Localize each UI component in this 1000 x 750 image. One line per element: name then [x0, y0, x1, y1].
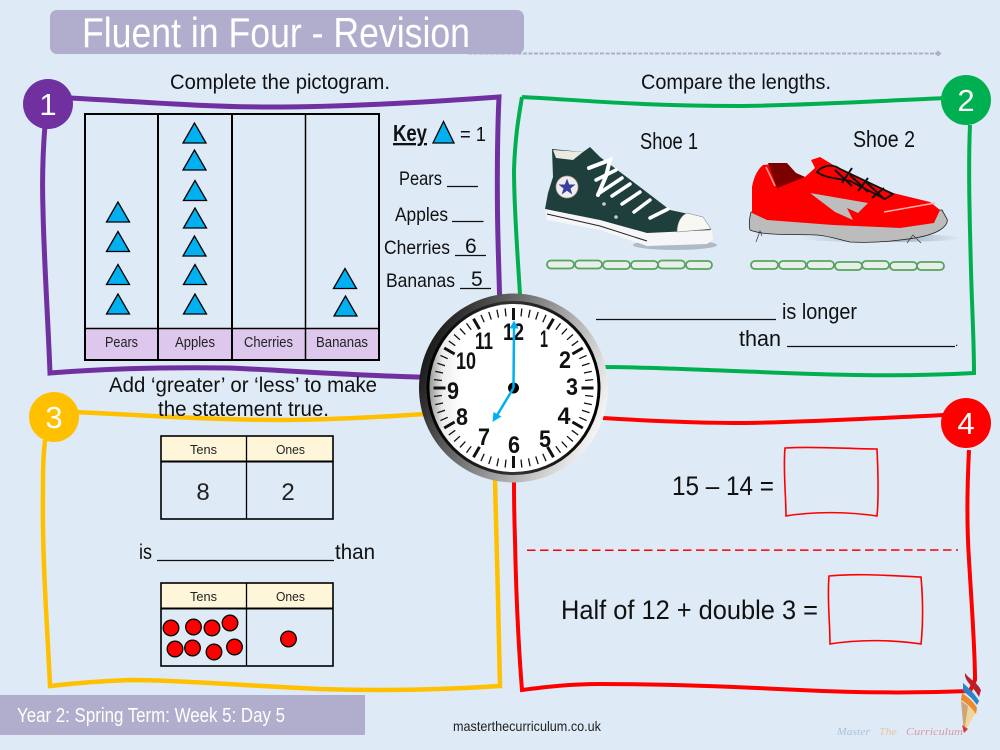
comparison sentence: than	[739, 326, 781, 351]
clock numerals	[447, 319, 578, 459]
website address: masterthecurriculum.co.uk	[453, 718, 602, 734]
divider	[527, 549, 958, 551]
clock numerals: 1	[540, 326, 548, 353]
number badge 1	[23, 79, 73, 129]
clock numerals: 5	[539, 426, 551, 453]
number badge 2: 2	[957, 83, 975, 118]
clock numerals: 6	[508, 432, 520, 459]
footer banner: Year 2: Spring Term: Week 5: Day 5	[17, 705, 285, 727]
panel 3 heading: Add ‘greater’ or ‘less’ to make	[109, 374, 377, 397]
title banner: Fluent in Four - Revision	[82, 9, 470, 56]
number badge 1: 1	[39, 87, 57, 122]
clock numerals: 12	[503, 319, 524, 346]
number badge 3: 3	[45, 400, 63, 435]
logo text: Master	[836, 727, 871, 738]
clock numerals: 9	[447, 378, 459, 405]
equation 1: 15 – 14 =	[672, 471, 774, 501]
comparison sentence	[596, 299, 958, 351]
clock numerals: 10	[456, 348, 476, 375]
answer box 1	[784, 447, 878, 516]
statement line: than	[335, 541, 375, 564]
clock numerals: 11	[475, 328, 493, 355]
key and tally: Bananas	[386, 270, 455, 292]
clock numerals: 3	[566, 374, 578, 401]
pictogram triangles	[106, 123, 357, 316]
panel 3: greater or less: the statement true.	[158, 398, 329, 421]
title banner	[50, 9, 942, 56]
clock numerals: 2	[559, 347, 571, 374]
shoe 2 label: Shoe 2	[853, 126, 915, 152]
number badge 4	[941, 398, 991, 448]
panel 1 border	[43, 97, 501, 378]
equation 2: Half of 12 + double 3 =	[561, 595, 818, 625]
pictogram table: Bananas	[316, 335, 368, 351]
panel 1: pictogram	[43, 71, 501, 378]
panel 4 border	[514, 415, 975, 692]
place value table: counters	[161, 583, 333, 666]
key and tally: Apples	[395, 204, 448, 226]
number badge 3	[29, 392, 79, 442]
icon: red running shoe	[749, 157, 962, 243]
comparison sentence: is longer	[782, 299, 857, 324]
panel 3 border	[43, 412, 500, 690]
paperclips under shoe 1	[547, 260, 712, 269]
panel 4: calculations	[514, 415, 975, 692]
logo text: Curriculum	[906, 727, 963, 738]
number badge 4: 4	[957, 406, 975, 441]
panel 3: greater or less	[43, 374, 500, 690]
clock numerals: 8	[456, 404, 468, 431]
pictogram table: Apples	[175, 335, 215, 351]
clock numerals: 4	[558, 403, 571, 430]
comparison sentence: .	[955, 335, 958, 349]
key and tally	[384, 120, 491, 292]
icon: pencil logo	[961, 673, 981, 733]
pictogram table: Pears	[105, 335, 138, 351]
clock hands	[492, 320, 519, 422]
icon: green high-top shoe	[545, 147, 717, 250]
place value table: 82: Ones	[276, 443, 305, 457]
answer box 2	[828, 575, 922, 644]
key and tally: 5	[471, 268, 483, 291]
key and tally: Key	[393, 120, 427, 146]
footer banner	[0, 695, 365, 735]
panel 2 border	[514, 97, 974, 375]
pictogram table	[85, 114, 379, 360]
key and tally: 6	[465, 235, 477, 258]
clock numerals: 7	[478, 424, 490, 451]
statement line	[139, 541, 375, 564]
place value table: counters: Tens	[190, 590, 217, 604]
logo text: The	[879, 727, 897, 738]
statement line: is	[139, 541, 152, 564]
pictogram table: Cherries	[244, 335, 293, 351]
panel 2 heading: Compare the lengths.	[641, 71, 831, 94]
number badge 2	[941, 75, 991, 125]
logo text	[836, 727, 963, 738]
clock minute ticks	[434, 308, 593, 468]
place value table: 82: Tens	[190, 443, 217, 457]
panel 1 heading: Complete the pictogram.	[170, 71, 390, 94]
key and tally: = 1	[460, 124, 486, 146]
place value table: 82	[161, 436, 333, 519]
clock hour ticks	[434, 308, 594, 468]
key and tally: Cherries	[384, 237, 450, 259]
place value table: counters: Ones	[276, 590, 305, 604]
shoe 1 label: Shoe 1	[640, 128, 698, 154]
paperclips under shoe 2	[751, 261, 944, 270]
place value table: 82: 2	[281, 479, 295, 506]
place value table: 82: 8	[196, 479, 210, 506]
panel 2: compare lengths	[514, 71, 974, 375]
key and tally: Pears	[399, 168, 442, 190]
clock	[419, 294, 608, 482]
